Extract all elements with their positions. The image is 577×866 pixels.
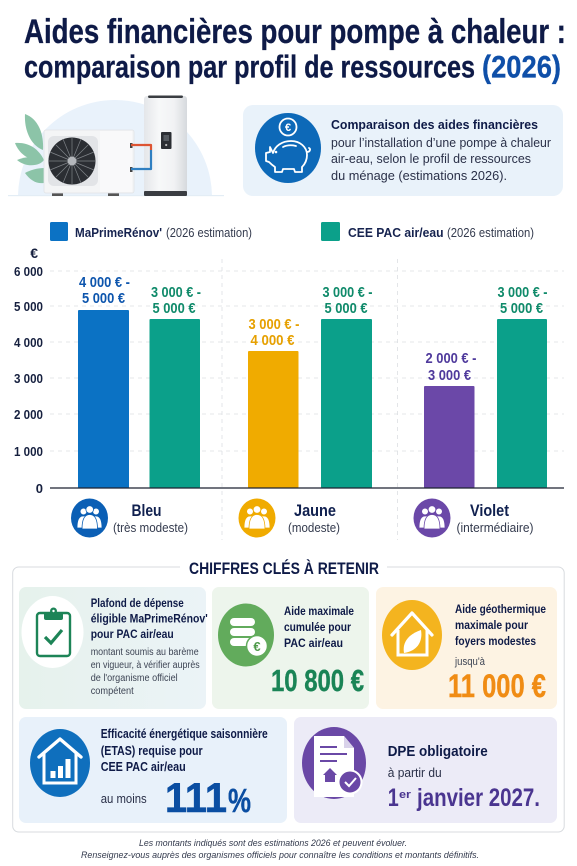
- icon: coins: [230, 618, 268, 656]
- card: ETAS: Efficacité énergétique saisonnière: [101, 727, 268, 741]
- y axis labels: 5 000: [14, 299, 43, 314]
- bar value labels: 5 000 €: [324, 301, 368, 317]
- category: Jaune: (modeste): [288, 520, 340, 535]
- category: Violet: [414, 498, 534, 538]
- title: comparaison par profil de ressources: [24, 48, 475, 84]
- card: max cumulated aid: 10 800 €: [271, 663, 364, 698]
- bar value labels: 5 000 €: [500, 301, 543, 317]
- card: DPE: DPE obligatoire: [388, 743, 488, 760]
- icon: clipboard: [37, 608, 70, 656]
- card: max cumulated aid: [212, 587, 369, 709]
- heading: key figures: CHIFFRES CLÉS À RETENIR: [189, 559, 379, 578]
- icon: piggy bank: €: [285, 122, 291, 134]
- card: spending cap: Plafond de dépense: [91, 596, 184, 610]
- title: (2026): [482, 48, 561, 84]
- bar value labels: 3 000 €: [428, 368, 471, 384]
- footnote: Les montants indiqués sont des estimations 2026 et peuvent évoluer.: [139, 838, 407, 849]
- intro text: Comparaison des aides financières: [331, 117, 538, 132]
- card: geothermal aid: [376, 587, 557, 709]
- card: spending cap: éligible MaPrimeRénov': [91, 612, 208, 626]
- card: DPE: er: [399, 789, 412, 801]
- footnote: [81, 838, 479, 861]
- icon: people: [77, 506, 102, 529]
- bars: [78, 310, 547, 488]
- bar value labels: 4 000 € -: [79, 275, 130, 291]
- card: DPE: [294, 717, 557, 823]
- icon: people: [244, 506, 270, 529]
- card: spending cap: montant soumis au barème: [91, 647, 199, 658]
- y axis labels: 3 000: [14, 371, 43, 386]
- card: geothermal aid: jusqu'à: [454, 656, 486, 668]
- intro text: [331, 117, 552, 183]
- card: spending cap: en vigueur, à vérifier auprès: [91, 660, 200, 671]
- panel: intro: [243, 105, 563, 196]
- y axis labels: 4 000: [14, 335, 43, 350]
- card: ETAS: (ETAS) requise pour: [101, 744, 203, 758]
- bar value labels: 2 000 € -: [426, 351, 477, 367]
- icon: water tank: [144, 96, 187, 196]
- card: DPE: 1: [388, 784, 399, 812]
- category: Violet: Violet: [470, 501, 509, 520]
- icon: outdoor unit: [44, 130, 134, 196]
- icon: house with bars: [39, 739, 81, 783]
- card: ETAS: CEE PAC air/eau: [101, 760, 186, 774]
- legend: CEE PAC air/eau: [348, 225, 444, 240]
- legend: [50, 222, 534, 241]
- y axis labels: 6 000: [14, 264, 43, 279]
- intro text: du ménage (estimations 2026).: [331, 168, 507, 183]
- bar value labels: 5 000 €: [152, 301, 196, 317]
- y axis labels: 1 000: [14, 444, 43, 459]
- y axis labels: 0: [36, 481, 43, 496]
- icon: pipes: [131, 145, 151, 169]
- y axis labels: 2 000: [14, 407, 43, 422]
- footnote: Renseignez-vous auprès des organismes officiels pour connaître les conditions et montants définitifs.: [81, 850, 479, 861]
- card: spending cap: de l'organisme officiel: [91, 673, 178, 684]
- legend: (2026 estimation): [166, 225, 252, 240]
- card: geothermal aid: foyers modestes: [455, 634, 536, 648]
- category: Jaune: Jaune: [294, 501, 336, 520]
- illustration: heat pump and water tank: [8, 96, 224, 196]
- y axis labels: [14, 245, 43, 496]
- icon: leaves: [15, 114, 44, 183]
- card: DPE: janvier 2027.: [416, 784, 540, 812]
- legend: MaPrimeRénov': [75, 225, 162, 240]
- category: Violet: (intermédiaire): [456, 520, 534, 535]
- intro text: air-eau, selon le profil de ressources: [331, 151, 531, 166]
- card: max cumulated aid: PAC air/eau: [284, 636, 343, 650]
- bar value labels: 3 000 € -: [498, 285, 548, 301]
- card: ETAS: [19, 717, 287, 823]
- icon: piggy bank: [255, 113, 321, 183]
- card: ETAS: 111: [165, 774, 227, 821]
- bar value labels: 3 000 € -: [248, 317, 300, 333]
- bar value labels: 3 000 € -: [322, 285, 373, 301]
- card: spending cap: compétent: [91, 686, 134, 697]
- icon: coins: €: [253, 639, 261, 654]
- title: [24, 13, 566, 84]
- card: ETAS: au moins: [101, 791, 147, 806]
- card: max cumulated aid: cumulée pour: [284, 620, 351, 634]
- card: spending cap: pour PAC air/eau: [91, 627, 174, 641]
- bar value labels: 3 000 € -: [151, 285, 201, 301]
- legend: (2026 estimation): [447, 225, 534, 240]
- icon: document with check: [314, 736, 362, 797]
- card: DPE: à partir du: [388, 766, 442, 780]
- bar value labels: 4 000 €: [250, 333, 294, 349]
- card: ETAS: %: [228, 782, 251, 819]
- bar value labels: [79, 275, 548, 384]
- card: spending cap: [19, 587, 208, 709]
- category: Bleu: [71, 498, 188, 538]
- category: Jaune: [238, 498, 340, 538]
- card: max cumulated aid: Aide maximale: [284, 604, 354, 618]
- category: Bleu: Bleu: [132, 501, 162, 520]
- intro text: pour l’installation d’une pompe à chaleur: [331, 135, 552, 150]
- category: Bleu: (très modeste): [113, 520, 188, 535]
- y axis labels: €: [30, 245, 38, 261]
- panel: key figures: [13, 559, 564, 832]
- card: geothermal aid: 11 000 €: [448, 668, 546, 704]
- card: geothermal aid: Aide géothermique: [455, 602, 546, 616]
- icon: people: [419, 506, 445, 529]
- card: geothermal aid: maximale pour: [455, 618, 528, 632]
- bar chart: [14, 245, 564, 540]
- bar value labels: 5 000 €: [82, 291, 125, 307]
- icon: house with leaf: [392, 613, 432, 655]
